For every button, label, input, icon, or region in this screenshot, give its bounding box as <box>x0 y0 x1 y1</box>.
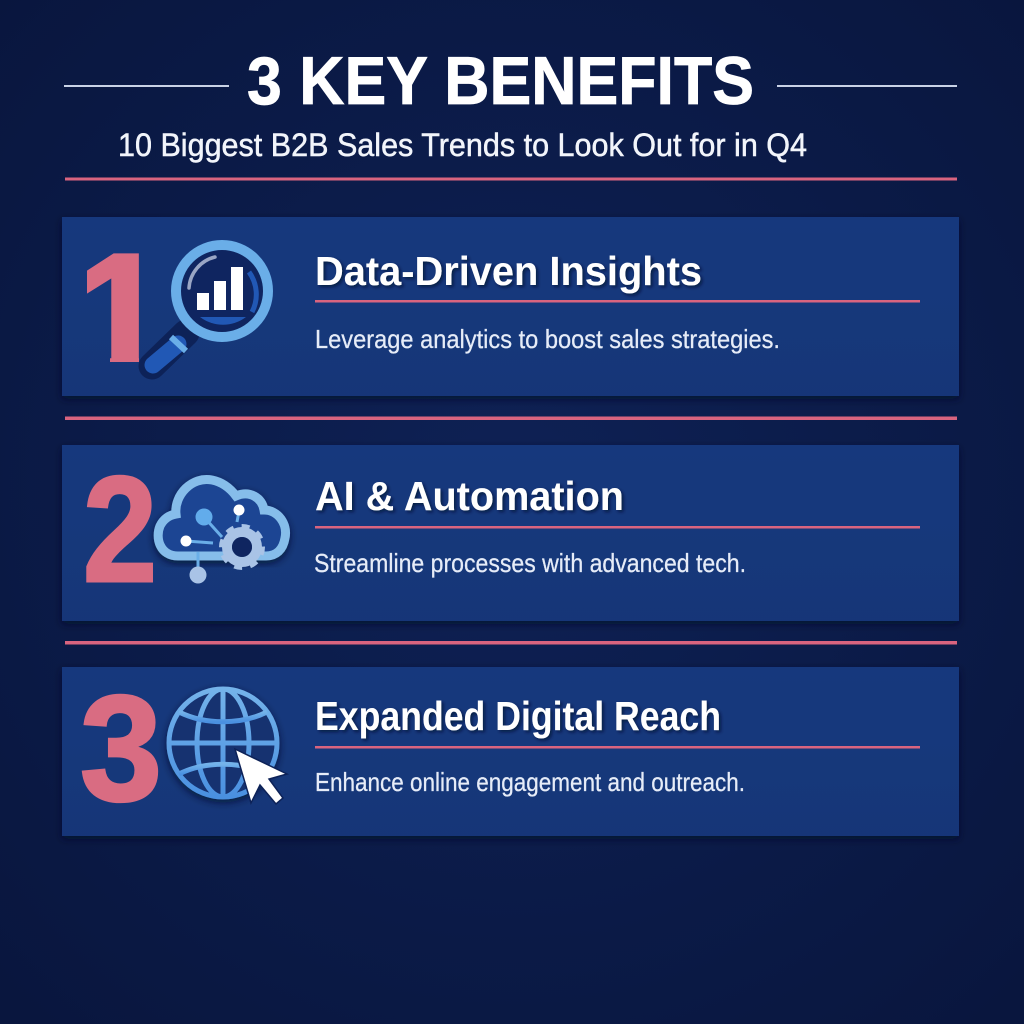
icon: magnifying glass with bar chart <box>152 245 268 366</box>
description: Streamline processes with advanced tech. <box>314 548 746 578</box>
heading: Data-Driven Insights <box>315 248 702 294</box>
infographic canvas <box>59 56 964 844</box>
heading: Expanded Digital Reach <box>315 693 721 739</box>
heading: AI & Automation <box>315 473 624 519</box>
icon: cloud with nodes and gear <box>158 479 286 584</box>
number 3: 3 <box>80 664 162 832</box>
subtitle: 10 Biggest B2B Sales Trends to Look Out for in Q4 <box>118 127 807 163</box>
description: Leverage analytics to boost sales strategies. <box>315 324 780 354</box>
description: Enhance online engagement and outreach. <box>315 767 745 797</box>
title: 3 KEY BENEFITS <box>247 43 754 119</box>
panel: expanded digital reach <box>62 664 959 836</box>
number 2: 2 <box>83 445 157 613</box>
panel: ai and automation <box>62 445 959 621</box>
panel: data-driven insights <box>62 216 959 416</box>
icon: globe with cursor <box>169 689 287 804</box>
number 1: 1 <box>71 216 171 416</box>
